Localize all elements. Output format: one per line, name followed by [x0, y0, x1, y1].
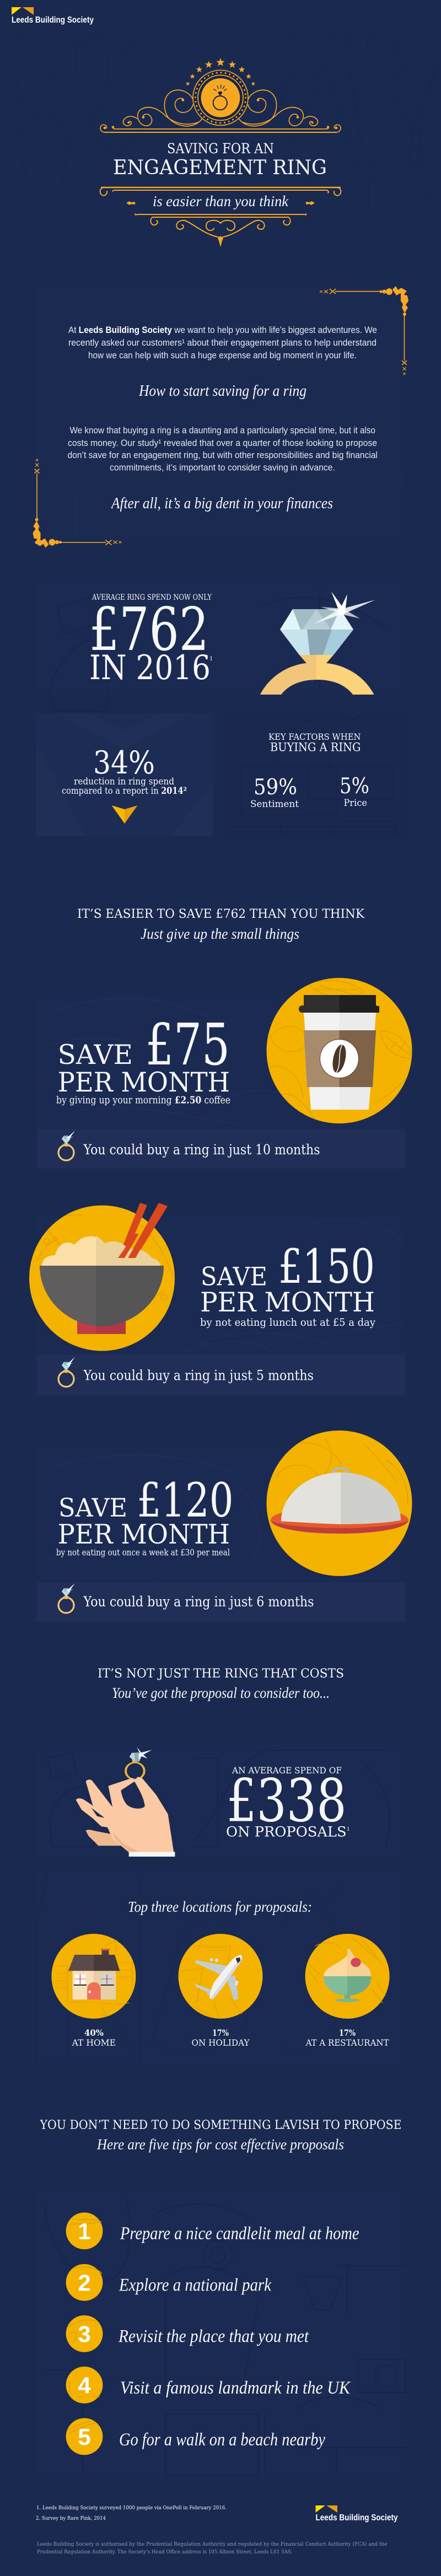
location: at a restaurant: AT A RESTAURANT	[305, 2037, 389, 2048]
panel: top three locations	[36, 1872, 405, 2066]
tip 4: Visit a famous landmark in the UK	[120, 2378, 351, 2398]
location: at a restaurant	[305, 1934, 390, 2048]
stat: price	[340, 774, 369, 809]
save £75 headline: PER MONTH	[58, 1067, 230, 1098]
stat: sentiment: Sentiment	[250, 799, 299, 810]
footnotes	[36, 2505, 227, 2521]
save £75 headline	[56, 1011, 230, 1106]
banner: is easier than you think with scroll rules	[100, 187, 341, 247]
save £75 headline: SAVE	[58, 1039, 133, 1071]
panel: eating out saving	[36, 1430, 412, 1622]
body paragraph: costs money. Our study¹ revealed that over a quarter of those looking to propose	[68, 438, 377, 448]
intro paragraph	[68, 325, 377, 361]
reduction caption: reduction in ring spend	[74, 776, 174, 787]
cloche illustration	[267, 1430, 412, 1576]
panel: 34% reduction	[36, 713, 213, 836]
title: saving for an engagement ring: SAVING FOR AN	[167, 141, 274, 157]
callout: buy in 10 months: You could buy a ring in just 10 months	[83, 1142, 320, 1158]
tip 4	[66, 2367, 351, 2403]
location: at home: AT HOME	[72, 2037, 116, 2048]
panel: coffee saving	[36, 978, 413, 1169]
callout: buy in 6 months: You could buy a ring in just 6 months	[83, 1594, 314, 1610]
section heading: nothing lavish: Here are five tips for cost effective proposals	[96, 2136, 344, 2153]
ring savings strip	[36, 1355, 405, 1395]
key factors heading: BUYING A RING	[270, 741, 361, 754]
section heading: not just the ring: IT’S NOT JUST THE RING THAT COSTS	[98, 1667, 344, 1681]
corner ornament: top right	[320, 286, 408, 375]
legal text: Prudential Regulation Authority. The Society’s Head Office address is 105 Albion Street, Leeds LS1 5AS.	[37, 2549, 292, 2555]
key factors heading: KEY FACTORS WHEN	[268, 732, 361, 742]
banner: is easier than you think with scroll rules: is easier than you think	[153, 193, 289, 209]
save £120 headline: SAVE	[58, 1493, 127, 1523]
ring savings strip	[36, 1129, 405, 1169]
tip 4: 4	[78, 2373, 91, 2398]
tip 5: 5	[78, 2424, 91, 2450]
£762 figure: £762	[89, 595, 209, 664]
average ring spend heading: AVERAGE RING SPEND NOW ONLY	[92, 593, 212, 602]
panel: lunch saving	[29, 1203, 405, 1395]
icon: ring	[58, 1583, 75, 1613]
panel: key factors	[224, 711, 405, 838]
logo: Leeds Building Society footer	[315, 2505, 398, 2523]
intro paragraph: how we can help with such a huge expense and big moment in your life.	[88, 351, 357, 361]
tip 3	[66, 2315, 309, 2352]
panel: five tips	[36, 2191, 405, 2478]
34% figure: 34%	[93, 745, 155, 781]
title: saving for an engagement ring: ENGAGEMENT RING	[113, 157, 327, 179]
tip 3: 3	[78, 2321, 91, 2347]
stat: price: 5%	[340, 774, 369, 799]
tip 2: Explore a national park	[119, 2276, 272, 2295]
location: on holiday: 17%	[212, 2028, 229, 2038]
save £120 headline: £120	[137, 1473, 234, 1528]
icon: ice cream	[305, 1934, 390, 2019]
stars arc	[186, 58, 255, 85]
scrollwork right	[239, 90, 341, 132]
tip 5	[66, 2418, 325, 2455]
legal text: Leeds Building Society is authorised by the Prudential Regulation Authority and regulated by the Financial Conduct Authority (FCA) and the	[37, 2541, 388, 2547]
legal text	[37, 2541, 388, 2555]
arrow down	[111, 805, 138, 824]
section heading: easier to save: IT’S EASIER TO SAVE £762 THAN YOU THINK	[77, 907, 365, 921]
bowl illustration	[29, 1203, 175, 1351]
background doodles: gifts, hearts and cupcake behind the title	[15, 31, 439, 228]
panel: proposal spend	[36, 1745, 405, 1857]
title crest: stars, ring medallion and scrollwork	[100, 58, 341, 132]
tip 1: 1	[78, 2218, 91, 2244]
body paragraph: commitments, it’s important to consider saving in advance.	[110, 463, 335, 473]
intro paragraph: recently asked our customers¹ about their engagement plans to help understand	[68, 338, 377, 348]
save £120 headline: by not eating out once a week at £30 per meal	[56, 1548, 230, 1558]
subheading: top three locations: Top three locations for proposals:	[128, 1899, 312, 1915]
location: at home: 40%	[84, 2028, 104, 2038]
logo: Leeds Building Society header: Leeds Building Society	[12, 15, 94, 25]
footnote marker: 1	[209, 656, 213, 662]
icon: plane	[178, 1934, 263, 2019]
subheading: how to start saving: How to start saving for a ring	[138, 383, 306, 400]
hand holding ring	[76, 1747, 175, 1857]
stat: sentiment	[250, 775, 299, 810]
average spend heading: AN AVERAGE SPEND OF	[232, 1766, 342, 1776]
tip 3: Revisit the place that you met	[118, 2327, 309, 2347]
body paragraph: We know that buying a ring is a daunting and a particularly special time, but it also	[69, 426, 375, 435]
icon: diamond ring	[260, 591, 375, 695]
icon: ring	[58, 1357, 75, 1387]
body paragraph: don’t save for an engagement ring, but with other responsibilities and big financial	[67, 450, 378, 460]
scrollwork left	[100, 90, 336, 132]
save £150 headline	[200, 1240, 375, 1329]
save £150 headline: by not eating lunch out at £5 a day	[200, 1316, 375, 1329]
save £150 headline: PER MONTH	[200, 1287, 375, 1318]
icon: ring	[58, 1131, 75, 1160]
location: at home	[51, 1934, 136, 2048]
section heading: easier to save: Just give up the small things	[141, 926, 299, 942]
footnote marker: 1	[347, 1827, 350, 1832]
intro paragraph: At Leeds Building Society we want to help you with life’s biggest adventures. We	[68, 325, 377, 335]
location: at a restaurant: 17%	[339, 2028, 356, 2038]
save £150 headline: SAVE	[201, 1261, 267, 1291]
section heading: nothing lavish	[40, 2118, 402, 2153]
key factors heading	[268, 732, 361, 754]
save £75 headline: by giving up your morning £2.50 coffee	[56, 1095, 230, 1106]
£338 figure: £338	[227, 1767, 347, 1836]
in 2016: IN 2016	[89, 648, 211, 687]
panel: average ring spend	[36, 579, 405, 761]
ring savings strip	[36, 1582, 405, 1622]
location: on holiday	[178, 1934, 263, 2048]
ring medallion	[193, 70, 248, 125]
section heading: not just the ring: You’ve got the proposal to consider too...	[112, 1685, 330, 1701]
body paragraph	[67, 426, 378, 473]
section heading: nothing lavish: YOU DON’T NEED TO DO SOMETHING LAVISH TO PROPOSE	[40, 2118, 402, 2132]
footnotes: 2. Survey by Rare Pink, 2014	[36, 2515, 106, 2521]
callout: buy in 5 months: You could buy a ring in just 5 months	[83, 1367, 314, 1383]
tip 1	[66, 2213, 359, 2249]
corner ornament: bottom left	[33, 459, 121, 548]
logo: Leeds Building Society header	[12, 7, 94, 25]
tip 1: Prepare a nice candlelit meal at home	[120, 2224, 359, 2244]
save £120 headline: PER MONTH	[58, 1519, 230, 1550]
save £120 headline	[56, 1473, 234, 1558]
section heading: not just the ring	[98, 1667, 344, 1701]
save £75 headline: £75	[146, 1011, 230, 1078]
on proposals: ON PROPOSALS	[226, 1824, 347, 1840]
icon: house	[51, 1934, 136, 2019]
subheading: big dent: After all, it’s a big dent in your finances	[110, 495, 333, 512]
reduction caption: compared to a report in 2014²	[62, 786, 187, 797]
tip 2: 2	[78, 2270, 91, 2295]
tip 5: Go for a walk on a beach nearby	[119, 2430, 325, 2450]
footnotes: 1. Leeds Building Society surveyed 1000 people via OnePoll in February 2016.	[36, 2505, 227, 2511]
stat: sentiment: 59%	[254, 775, 297, 800]
location: on holiday: ON HOLIDAY	[192, 2037, 250, 2048]
panel: intro with background doodles	[36, 287, 405, 541]
reduction caption	[62, 776, 187, 797]
title: saving for an engagement ring	[113, 141, 327, 179]
stat: price: Price	[344, 798, 367, 809]
coffee illustration	[267, 978, 413, 1123]
tip 2	[66, 2264, 272, 2301]
section heading: easier to save	[77, 907, 365, 942]
logo: Leeds Building Society footer: Leeds Building Society	[315, 2513, 398, 2523]
save £150 headline: £150	[278, 1240, 375, 1294]
